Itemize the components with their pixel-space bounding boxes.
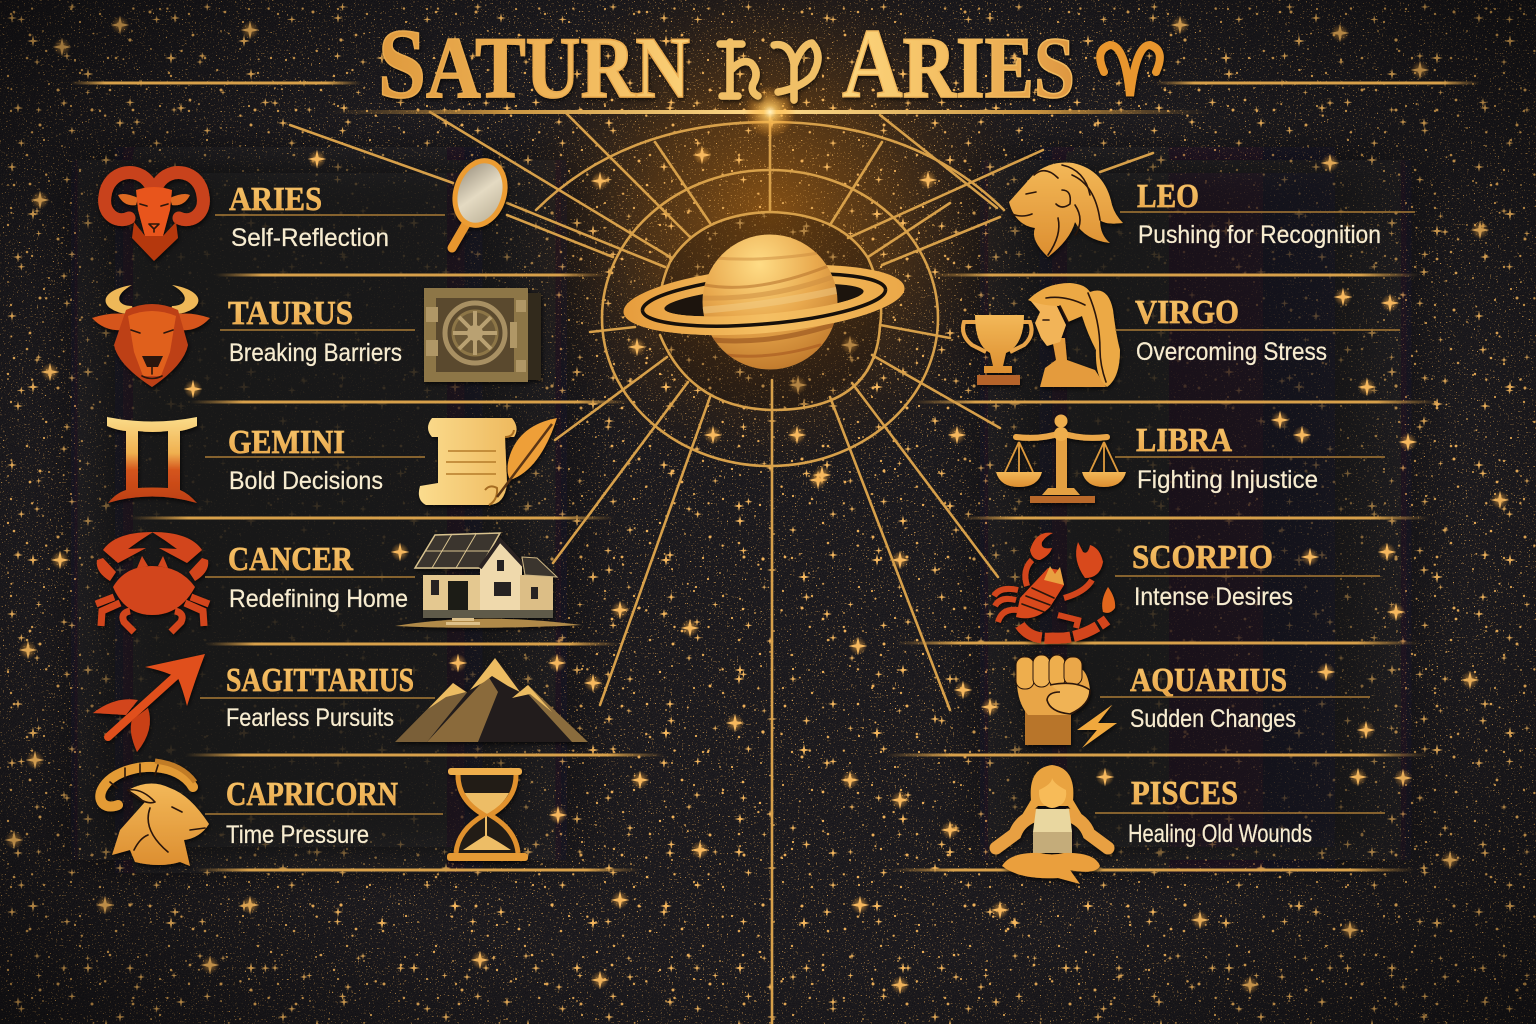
icon: bull [92, 285, 210, 387]
row: taurus [92, 285, 541, 387]
row: cancer [96, 532, 582, 632]
row: aquarius [1016, 655, 1370, 748]
label: SCORPIO [1132, 539, 1273, 576]
description: Sudden Changes [1130, 705, 1296, 733]
row: pisces [996, 765, 1385, 884]
icon: trophy [963, 315, 1032, 385]
panel: right column [963, 162, 1415, 884]
description: Overcoming Stress [1136, 338, 1327, 366]
title [378, 8, 1160, 119]
icon: lion [1009, 162, 1123, 257]
icon: aries glyph [1100, 45, 1160, 96]
icon: vault safe [424, 288, 541, 382]
icon: woman in profile [1028, 283, 1120, 387]
icon: scales [996, 414, 1126, 503]
icon: house with solar roof [395, 533, 582, 628]
label: PISCES [1131, 775, 1238, 812]
radial chart lines around the planet [290, 112, 1153, 1024]
row: libra [996, 414, 1385, 503]
row: scorpio [994, 533, 1380, 638]
label: SAGITTARIUS [226, 662, 414, 699]
icon: mountains [395, 658, 588, 742]
label: ARIES [229, 181, 322, 218]
row dividers [130, 274, 1440, 872]
label: TAURUS [228, 295, 353, 332]
label: VIRGO [1135, 294, 1239, 331]
description: Self-Reflection [231, 224, 389, 252]
title rules [70, 82, 1480, 138]
icon: scroll and quill [419, 418, 557, 505]
title: ARIES [842, 8, 1075, 119]
row: sagittarius [93, 654, 588, 752]
description: Bold Decisions [229, 467, 383, 495]
icon: crab [96, 532, 209, 632]
icon: hourglass [447, 768, 528, 861]
row: capricorn [100, 761, 528, 866]
row: aries [105, 154, 513, 261]
icon: hand mirror [447, 154, 513, 248]
icon: scorpion [994, 533, 1115, 638]
title: SATURN [378, 8, 690, 119]
icon: saturn glyph [720, 42, 818, 100]
label: CAPRICORN [226, 776, 398, 813]
icon: goat [100, 761, 209, 866]
icon: fist and lightning [1016, 655, 1117, 748]
label: AQUARIUS [1130, 662, 1287, 699]
label: GEMINI [228, 424, 345, 461]
label: CANCER [228, 541, 353, 578]
icon: arrow [93, 654, 205, 752]
description: Fighting Injustice [1137, 466, 1318, 494]
description: Fearless Pursuits [226, 704, 394, 732]
description: Breaking Barriers [229, 339, 402, 367]
label: LEO [1137, 178, 1199, 215]
description: Healing Old Wounds [1128, 820, 1312, 848]
description: Time Pressure [226, 821, 369, 849]
description: Intense Desires [1134, 583, 1293, 611]
label: LIBRA [1136, 422, 1232, 459]
icon: gemini glyph [107, 417, 197, 503]
planet saturn [621, 234, 907, 370]
row: virgo [963, 283, 1400, 387]
description: Redefining Home [229, 585, 408, 613]
description: Pushing for Recognition [1138, 221, 1381, 249]
icon: meditating figure [996, 765, 1108, 884]
row: leo [1009, 162, 1415, 257]
row: gemini [107, 417, 557, 505]
icon: ram [105, 173, 203, 261]
panel: left column [92, 154, 588, 866]
